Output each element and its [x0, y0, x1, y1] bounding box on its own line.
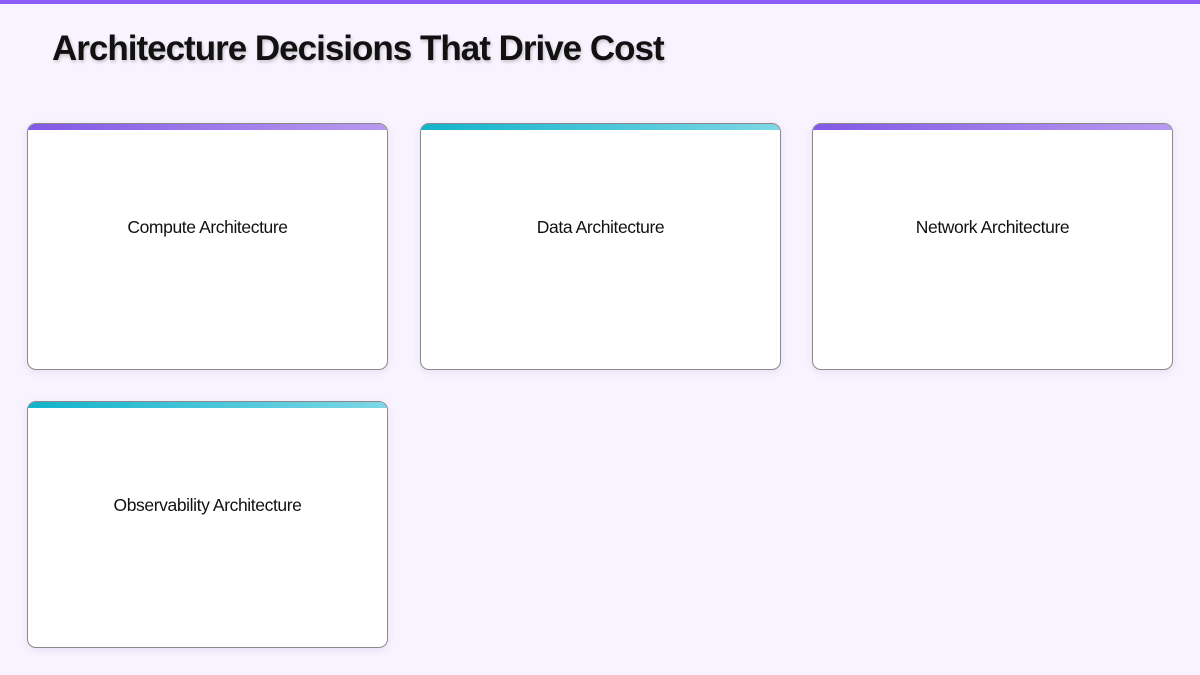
title: Architecture Decisions That Drive Cost	[52, 29, 664, 68]
panel: data architecture	[420, 123, 781, 370]
panel: compute architecture	[27, 123, 388, 370]
label: data: Data Architecture	[537, 217, 664, 237]
label: network: Network Architecture	[916, 217, 1069, 237]
label: compute: Compute Architecture	[127, 217, 288, 237]
label: observability: Observability Architecture	[113, 495, 302, 515]
panel: network architecture	[812, 123, 1173, 370]
panel: observability architecture	[27, 401, 388, 648]
